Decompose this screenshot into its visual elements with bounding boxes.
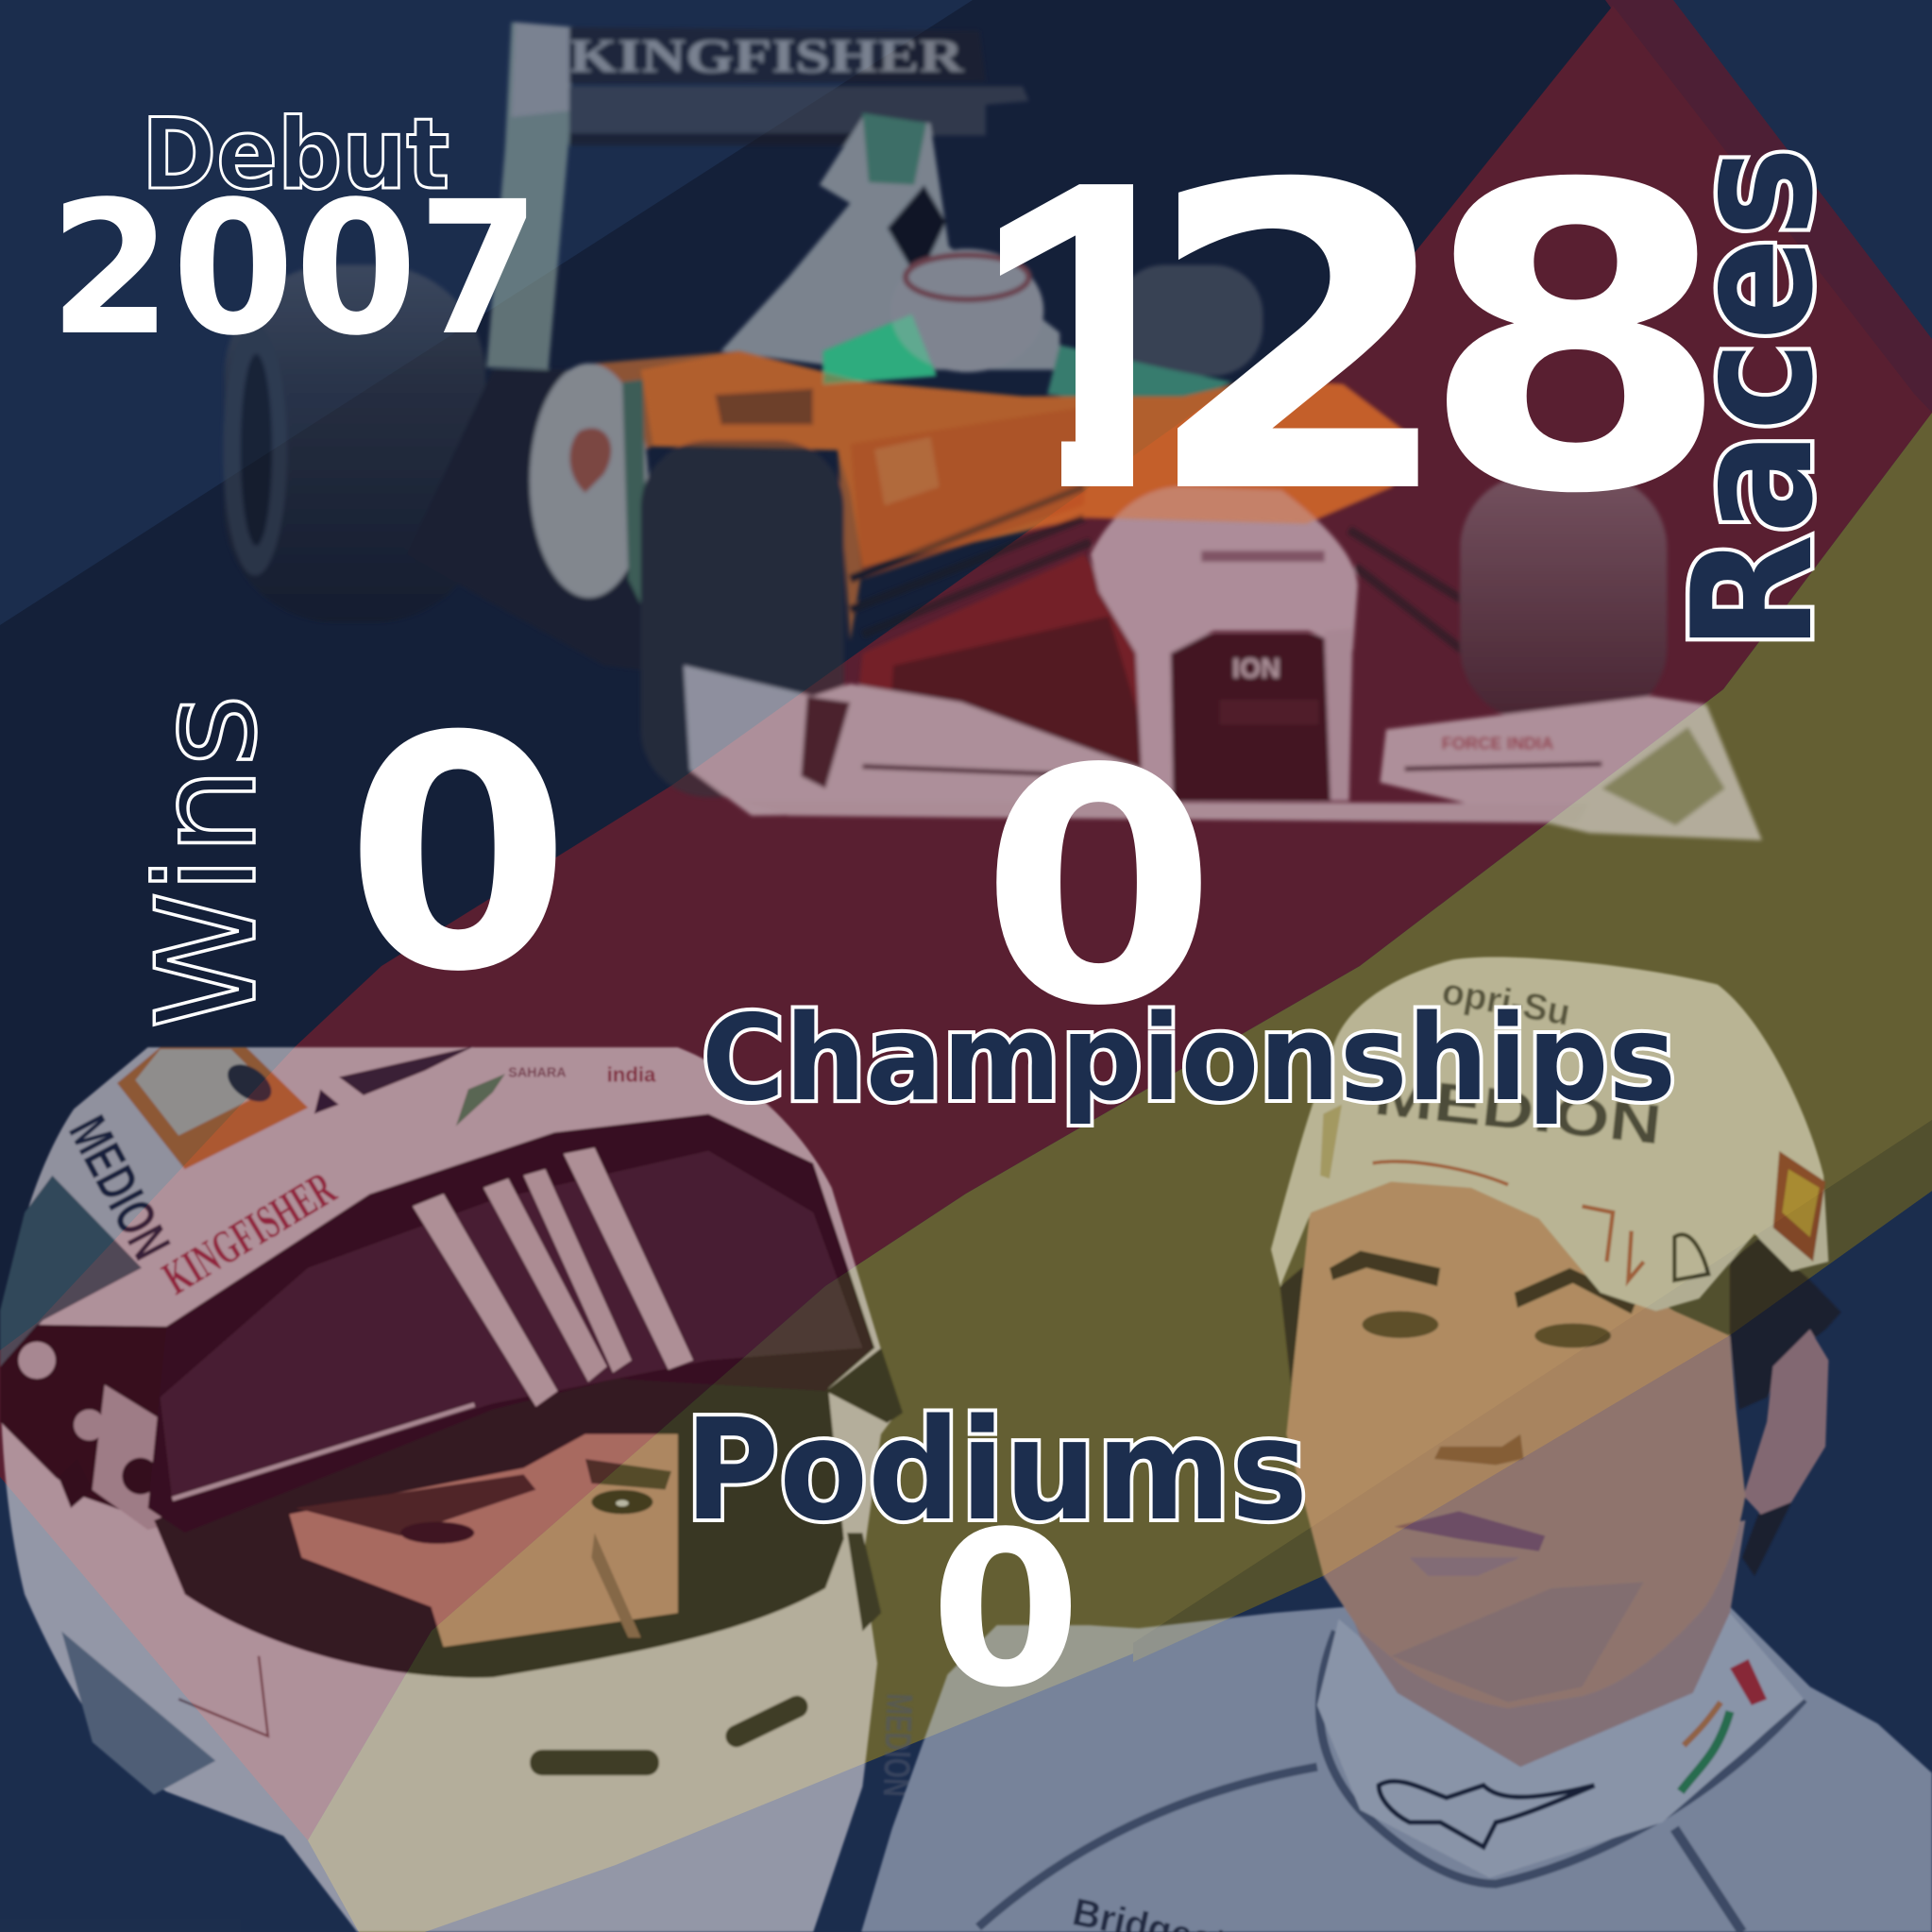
stat: races label: Races	[1658, 146, 1850, 652]
front wings	[684, 666, 1762, 840]
hair	[1280, 1237, 1840, 1576]
helmet shell	[0, 1047, 900, 1932]
stat: races number: 2	[1142, 97, 1457, 586]
suspension arms	[850, 486, 1479, 653]
neck	[1339, 1520, 1745, 1767]
visor	[148, 1114, 874, 1533]
lower bodywork in red	[850, 554, 1152, 801]
rear wing: KINGFISHER	[569, 30, 965, 82]
helmet logos: SAHARA	[508, 1065, 567, 1080]
stat: championships number: 0	[980, 701, 1217, 1076]
stat: races number	[1000, 174, 1704, 493]
cap: opri-Su	[1439, 972, 1573, 1034]
helmet orange design	[117, 1047, 308, 1169]
helmet vents	[530, 1750, 659, 1775]
stat: debut label: Debut	[142, 98, 449, 212]
rear tyre	[223, 265, 485, 622]
ear	[1743, 1330, 1828, 1515]
stat: wins label: Wins	[127, 694, 287, 1029]
left dark chin opening and visor mount	[0, 1325, 185, 1523]
photo: driver in helmet	[0, 1046, 920, 1932]
left front tyre	[641, 440, 844, 797]
photo: racing car	[223, 22, 1762, 840]
floor and rear suspension	[407, 369, 653, 671]
nose cone	[1091, 486, 1358, 807]
facial features	[1330, 1250, 1644, 1703]
visor tab	[825, 1348, 903, 1423]
helmet logos: MEDION	[58, 1106, 182, 1269]
orange bodywork	[579, 351, 1405, 641]
driver cockpit and engine cover	[720, 113, 1263, 413]
cap	[1271, 958, 1828, 1311]
chin text: MEDION	[874, 1693, 920, 1798]
stat: races number: 8	[1419, 96, 1732, 585]
stat: podiums number: 0	[930, 1486, 1081, 1735]
photo: driver portrait	[861, 958, 1932, 1932]
collar details	[1379, 1659, 1767, 1847]
stat: championships label: Championships	[702, 989, 1676, 1127]
shaded lower shell	[61, 1632, 215, 1795]
stat: debut year: 2007	[49, 161, 540, 376]
chin flap line	[178, 1656, 268, 1737]
stat: races number: 1	[956, 90, 1242, 580]
front wings: FORCE INDIA	[1442, 733, 1553, 753]
racesuit	[861, 1607, 1932, 1932]
helmet logos: india	[607, 1063, 656, 1087]
face opening padding	[154, 1361, 844, 1678]
sidepod	[530, 364, 648, 598]
face	[1286, 1169, 1745, 1708]
face	[290, 1434, 678, 1647]
stat: podiums label: Podiums	[685, 1389, 1308, 1551]
helmet strap clip	[847, 1533, 881, 1632]
car bodywork colour glaze	[641, 314, 1405, 567]
helmet logos: KINGFISHER	[154, 1161, 345, 1305]
stat: wins number: 0	[345, 669, 571, 1042]
right front tyre	[1460, 474, 1667, 720]
rear wing	[486, 22, 1029, 369]
nose cone: ION	[1232, 654, 1280, 685]
collar	[1317, 1613, 1804, 1878]
side glass	[0, 1176, 142, 1366]
cap: MEDION	[1371, 1064, 1665, 1156]
helmet logos	[58, 1046, 656, 1305]
